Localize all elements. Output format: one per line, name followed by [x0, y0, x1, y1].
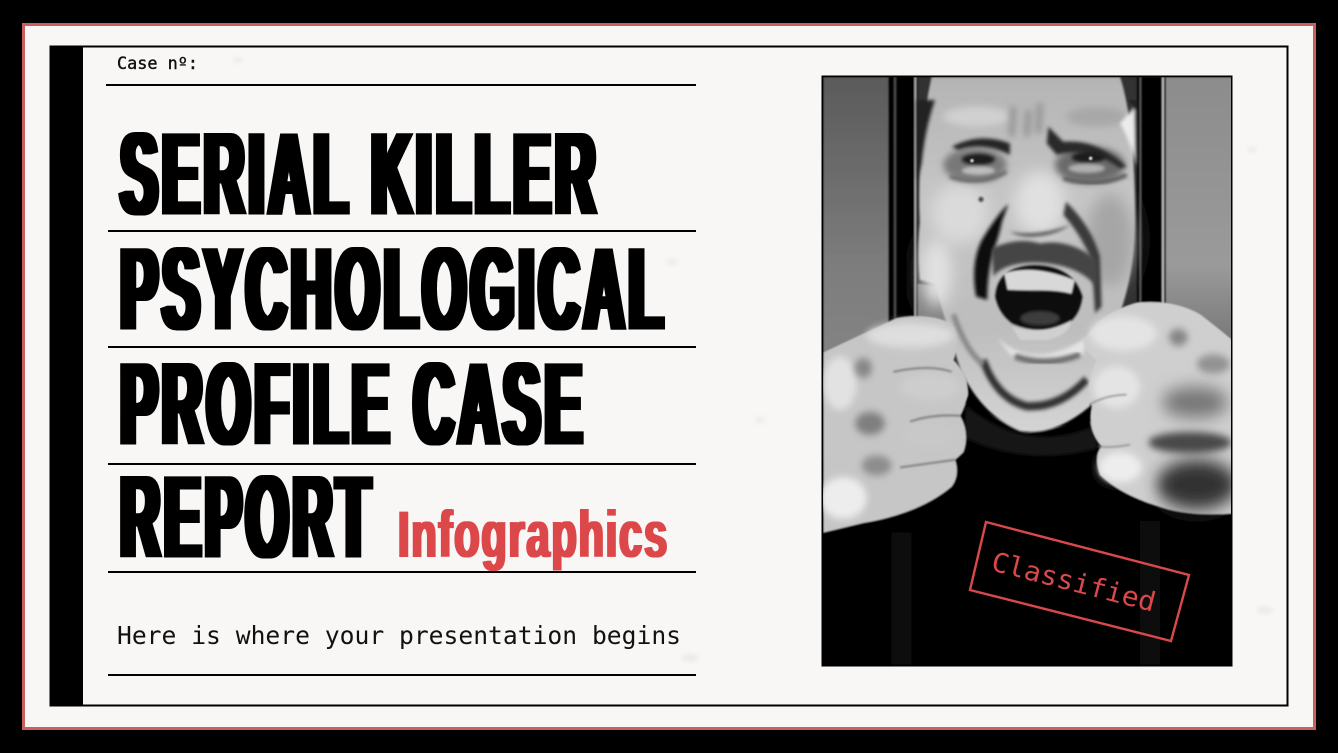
ruled lines	[106, 85, 696, 675]
black side bar	[50, 46, 83, 706]
classified stamp	[970, 522, 1189, 641]
right fist	[1083, 302, 1237, 514]
paper speckles	[233, 57, 1273, 662]
open mouth	[995, 265, 1083, 340]
left fist	[820, 316, 968, 532]
title	[120, 108, 668, 584]
eyes and brows	[943, 127, 1127, 202]
lower bar shadows	[892, 521, 1160, 664]
nasolabial shadows	[974, 202, 1102, 313]
photo: screaming man behind bars	[820, 77, 1237, 666]
shirt	[823, 402, 1233, 666]
prison bars	[888, 77, 1166, 322]
skin highlights and shading	[917, 100, 1137, 307]
case number label: Case nº:	[117, 54, 198, 73]
moustache	[992, 241, 1097, 287]
title: REPORT	[120, 452, 374, 584]
stamp text: Classified	[988, 547, 1159, 619]
slide: PSYCHOLOGICAL	[120, 224, 668, 356]
title: PROFILE CASE	[120, 338, 586, 470]
lower face and fists layer	[820, 302, 1237, 664]
lower lip and beard	[953, 314, 1087, 406]
tagline: Here is where your presentation begins	[117, 621, 681, 650]
infographics subtitle word: Infographics	[398, 497, 669, 571]
wall background	[823, 77, 913, 408]
title: SERIAL KILLER	[120, 108, 600, 240]
wall gap left of jaw	[916, 283, 946, 322]
body and background layer	[823, 77, 1233, 666]
face details	[917, 100, 1137, 340]
photo frame	[822, 76, 1232, 666]
stamp border	[970, 522, 1189, 641]
face	[918, 77, 1135, 432]
